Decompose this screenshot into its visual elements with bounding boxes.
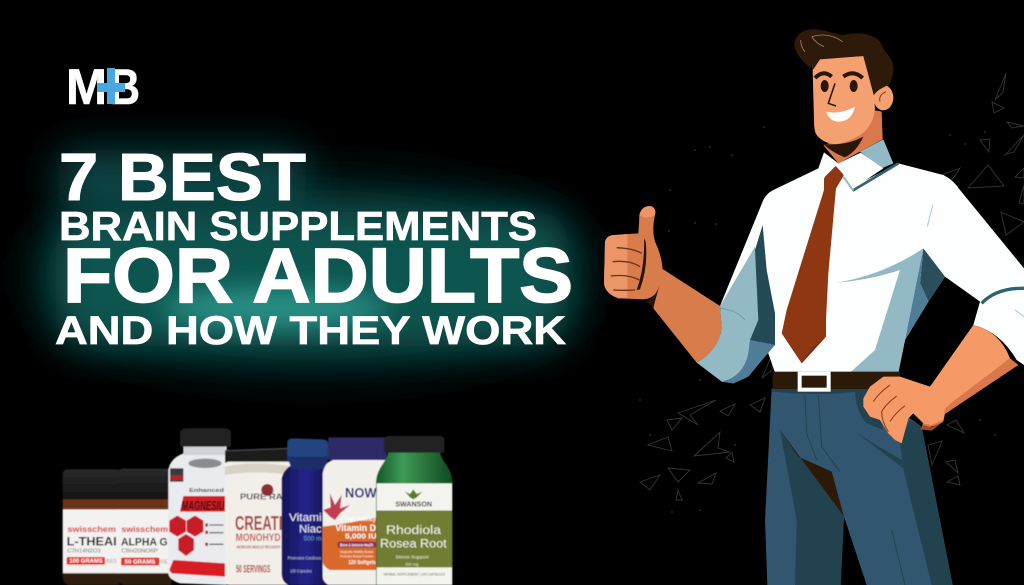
bottle: Vitamin B3 Niacin: 500 m [303, 536, 322, 543]
bottle: Alpha GPC jar [117, 469, 172, 585]
bottle: L-Theanine jar: 100 GRAMS [69, 559, 103, 565]
bottle: Swanson Rhodiola Rosea Root: Rhodiola [386, 523, 441, 537]
bottle: Swanson Rhodiola Rosea Root: Rosea Root [380, 536, 447, 550]
man: smile [826, 107, 855, 122]
bottle: Vitamin B3 Niacin: Vitami [289, 512, 322, 524]
bottle: NOW Vitamin D [323, 437, 387, 585]
man: trousers [765, 388, 953, 585]
bottle: NOW Vitamin D: High Potency [345, 517, 376, 523]
bottle: Vitamin B3 Niacin [282, 438, 332, 585]
man: shirt [697, 163, 1024, 383]
logo: M+B: M [66, 59, 107, 115]
bottle: Creatine Monohydrate tub: 50 SERVINGS [236, 563, 270, 575]
man: collar [817, 139, 898, 191]
bottle: Vitamin B3 Niacin: Promotes Cardiova [288, 555, 321, 560]
bottle: Alpha GPC jar: C8H20NO6P [121, 548, 158, 554]
teal glow behind title [40, 150, 580, 360]
man: left forearm [653, 268, 722, 363]
bottle: L-Theanine jar: C7H14N2O3 [67, 548, 101, 554]
man: belt [773, 372, 900, 390]
man: ear [873, 85, 893, 110]
bottle: L-Theanine jar [63, 469, 119, 585]
title line: FOR ADULTS: FOR ADULTS [63, 233, 573, 319]
man: right arm and hand [863, 325, 1018, 443]
man: neck shadow [823, 137, 863, 157]
man: thumbs-up hand [604, 206, 663, 307]
logo: M+B [66, 59, 140, 115]
bottle: Creatine Monohydrate tub: CREATI [235, 512, 282, 535]
character: man giving thumbs up [604, 29, 1024, 585]
man: necktie [782, 163, 844, 363]
bottle: Vitamin B3 Niacin: Niac [299, 524, 322, 536]
bottle: Alpha GPC jar: RE [161, 560, 168, 566]
bottle: NOW Vitamin D: Vitamin D [335, 523, 376, 533]
title line: AND HOW THEY WORK: AND HOW THEY WORK [55, 309, 566, 353]
product bottles [63, 428, 453, 585]
bottle: Swanson Rhodiola Rosea Root: HERBAL SUPPLEMENT | 100 CAPSULES [383, 572, 445, 576]
bottle: L-Theanine jar: swisschem [67, 524, 116, 534]
bottle: Alpha GPC jar: ALPHA G [121, 536, 168, 548]
bottle: Creatine Monohydrate tub: INCREASE MUSCLE RECOVERY [237, 544, 281, 549]
title [55, 140, 573, 353]
bottle: Magnesium [168, 428, 231, 585]
bottle: NOW Vitamin D: Bone & Immune Health [340, 542, 374, 547]
bottle: NOW Vitamin D: 120 Softgels [348, 560, 376, 566]
bottle: Swanson Rhodiola Rosea Root: Stress Support [395, 555, 429, 560]
bottle: Creatine Monohydrate tub: MONOHYD [236, 532, 281, 544]
bottle: Vitamin B3 Niacin: 100 Capsules [290, 568, 312, 574]
bottle: Magnesium: MAGNESIU [182, 498, 225, 513]
bottle: Alpha GPC jar: 50 GRAMS [125, 559, 156, 565]
bottle: Swanson Rhodiola Rosea Root: SWANSON [395, 502, 432, 509]
bottle: NOW Vitamin D: 5,000 IU [345, 532, 377, 541]
bottle: NOW Vitamin D: Promotes Muscle Function [340, 554, 373, 559]
bottle: L-Theanine jar: RES [106, 559, 117, 565]
bottle: Alpha GPC jar: swisschem [121, 524, 168, 534]
bottle: NOW Vitamin D: NOW [345, 484, 377, 500]
logo: M+B: B [110, 59, 140, 115]
man: hair [794, 29, 893, 95]
bottle: Creatine Monohydrate tub: PURE RA [240, 491, 283, 501]
title line: BRAIN SUPPLEMENTS: BRAIN SUPPLEMENTS [59, 203, 537, 249]
bottle: NOW Vitamin D: Supports Healthy Bones [340, 549, 373, 554]
scattered triangle particles [640, 73, 1024, 500]
title line: 7 BEST: 7 BEST [59, 140, 306, 215]
scattered dust dots [639, 126, 1006, 513]
bottle: L-Theanine jar: L-THEAI [67, 535, 117, 548]
man: nose [828, 83, 836, 106]
man: head [794, 29, 893, 157]
bottle: Magnesium: Enhanced [189, 488, 225, 494]
man: shirt fold [837, 248, 923, 373]
man: face [813, 56, 875, 144]
bottle: Swanson Rhodiola Rosea Root: 400 mg [405, 562, 418, 566]
bottle: Creatine Monohydrate tub [225, 448, 292, 585]
bottle: Swanson Rhodiola Rosea Root [376, 436, 453, 585]
man: eyes [821, 80, 829, 92]
man: left sleeve [697, 247, 775, 383]
man: neck [823, 110, 883, 163]
man: eyebrows [815, 73, 863, 78]
